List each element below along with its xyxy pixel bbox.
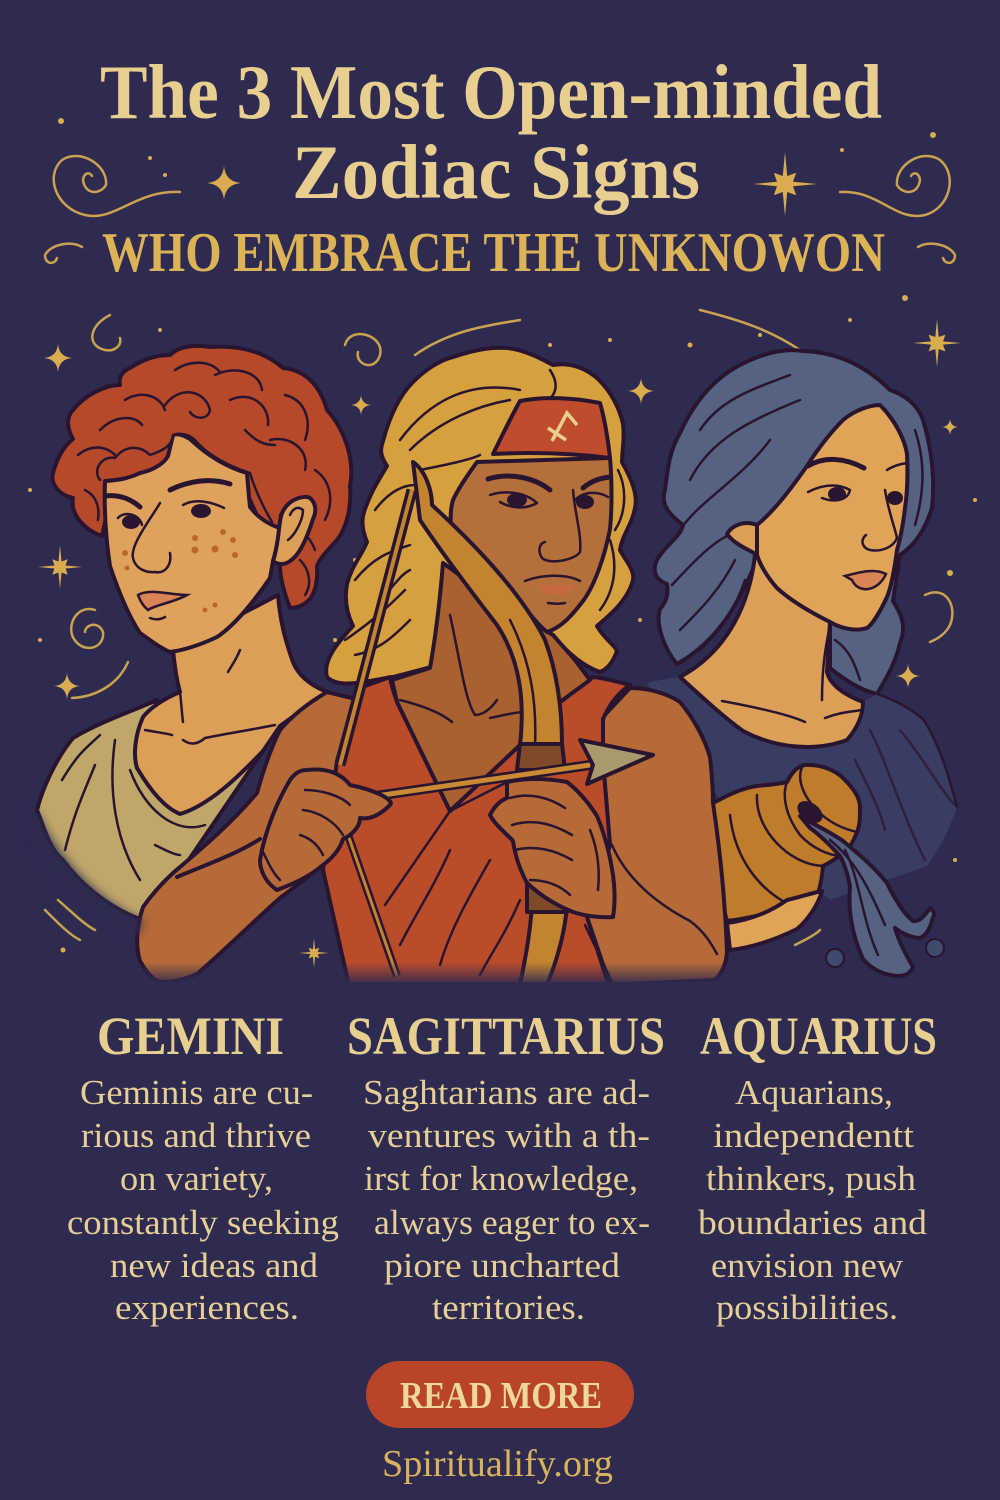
- Aquarius face: [757, 405, 907, 630]
- Gemini tunic folds: [62, 735, 205, 880]
- heading: Sagittarius: SAGITTARIUS: [347, 1006, 665, 1066]
- Sagittarius right arm: [587, 688, 727, 985]
- Aquarius hair: [655, 350, 933, 694]
- Gemini tunic: [37, 700, 263, 919]
- illustration: Sagittarius: [137, 348, 727, 990]
- Sagittarius facial features: [488, 476, 610, 604]
- Sagittarius headband: [493, 398, 610, 458]
- Gemini hairline outline: [97, 434, 272, 522]
- text block: Aquarius description: boundaries and: [698, 1203, 928, 1242]
- text block: Sagittarius description: ventures with a th-: [368, 1116, 650, 1155]
- Aquarius dress folds: [855, 730, 955, 860]
- water drops: [826, 939, 944, 967]
- text block: Sagittarius description: [363, 1073, 650, 1327]
- bow: [413, 462, 567, 985]
- pouring water: [800, 816, 934, 976]
- text block: Aquarius description: envision new: [711, 1246, 904, 1285]
- illustration: Gemini: [37, 346, 351, 919]
- heading: Gemini: GEMINI: [97, 1006, 284, 1066]
- Aquarius hair strands: [672, 375, 922, 680]
- illustration: Aquarius: [647, 350, 957, 976]
- Sagittarius left arm: [137, 692, 360, 982]
- Sagittarius tunic: [323, 677, 630, 990]
- right hand fingers: [510, 796, 599, 895]
- bottom fade of illustration: [130, 962, 740, 986]
- text block: Sagittarius description: territories.: [432, 1288, 585, 1327]
- text block: Sagittarius description: irst for knowledge,: [364, 1159, 638, 1198]
- decorative swirls and stars: [28, 118, 977, 968]
- heading: Aquarius: AQUARIUS: [700, 1006, 937, 1066]
- title: Zodiac Signs: [292, 129, 700, 215]
- tunic edge fade: [30, 815, 140, 928]
- text block: Gemini description: on variety,: [120, 1159, 273, 1198]
- button: read more: [366, 1361, 634, 1428]
- Sagittarius collar lines: [400, 615, 525, 722]
- jar opening: [797, 801, 822, 823]
- text block: Gemini description: [67, 1073, 339, 1327]
- right hand: [490, 779, 614, 917]
- panel: Gemini: [67, 1006, 339, 1327]
- text block: Gemini description: new ideas and: [110, 1246, 319, 1285]
- text block: Aquarius description: [698, 1073, 928, 1327]
- hand under jar: [727, 891, 822, 950]
- footer: website: Spiritualify.org: [382, 1443, 613, 1485]
- icon: water jar: [713, 765, 860, 921]
- Aquarius neck and chest: [680, 555, 863, 747]
- Gemini hair: [52, 346, 351, 608]
- Sagittarius hair strands: [345, 370, 624, 655]
- Sagittarius hair: [326, 348, 636, 684]
- text block: Aquarius description: thinkers, push: [706, 1159, 917, 1198]
- Aquarius facial features: [808, 459, 907, 589]
- title: [100, 49, 882, 215]
- panel: Sagittarius: [347, 1006, 665, 1327]
- Gemini curl strokes: [78, 363, 330, 595]
- text block: Gemini description: rious and thrive: [81, 1116, 311, 1155]
- Sagittarius neck and chest: [392, 563, 590, 811]
- left hand fingers: [262, 790, 350, 880]
- panel: Aquarius: [698, 1006, 937, 1327]
- Gemini collar lines: [145, 650, 275, 744]
- left hand: [260, 770, 391, 890]
- Sagittarius tunic folds: [385, 782, 612, 982]
- title: The 3 Most Open-minded: [100, 49, 882, 135]
- bowstring: [340, 490, 412, 976]
- Gemini hairline: [97, 410, 300, 522]
- Gemini neck and chest: [135, 595, 327, 814]
- Aquarius collar lines: [722, 625, 862, 722]
- text block: Aquarius description: Aquarians,: [735, 1073, 893, 1112]
- text block: Sagittarius description: piore uncharted: [384, 1246, 621, 1285]
- Gemini facial features: [105, 481, 238, 619]
- button: read more: READ MORE: [400, 1375, 602, 1417]
- text block: Gemini description: constantly seeking: [67, 1203, 339, 1242]
- icon: Sagittarius symbol: [548, 413, 577, 441]
- text block: Gemini description: experiences.: [115, 1288, 299, 1327]
- Gemini face: [105, 434, 280, 652]
- Aquarius dress: [647, 677, 957, 900]
- text block: Aquarius description: independentt: [713, 1116, 914, 1155]
- arrow: [355, 740, 653, 799]
- text block: Aquarius description: possibilities.: [716, 1288, 898, 1327]
- text block: Sagittarius description: always eager to ex-: [374, 1203, 650, 1242]
- Sagittarius face: [451, 458, 612, 632]
- Aquarius dress outline: [877, 694, 957, 807]
- text block: Sagittarius description: Saghtarians are ad-: [363, 1073, 650, 1112]
- Gemini ear: [273, 497, 315, 564]
- Aquarius ear: [727, 523, 757, 555]
- text block: Gemini description: Geminis are cu-: [80, 1073, 313, 1112]
